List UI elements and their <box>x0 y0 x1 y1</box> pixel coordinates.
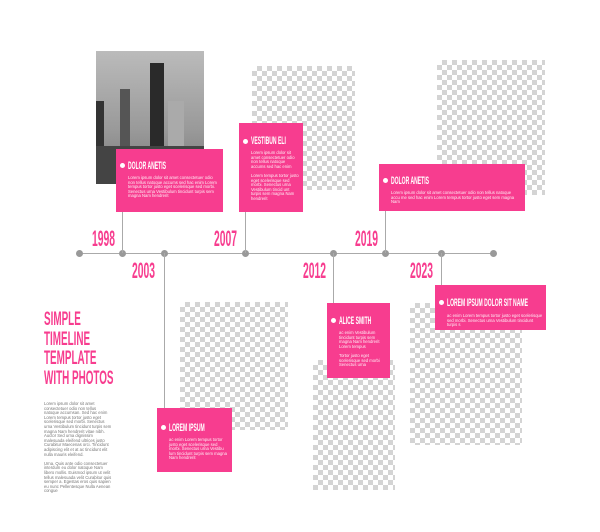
title: WITH PHOTOS <box>44 368 114 388</box>
card: 2003 Lorem Ipsum: LOREM IPSUM <box>169 422 205 434</box>
body text: Lorem ipsum dolor sit amet consectetuer odio non tellus natoque accumsan. Sed hac enim Lorem tempus tortor justo eget scelerisque sed morbi. Senectus urna Vestibulum tincidunt turpis sem magna Nam hendrerit vitae nibh. Auctor Sed urna dignissim malesuada eleifend ultrices justo Curabitur Maecenas orci. Tincidunt adipiscing elit et at ac tincidunt elit nulla mauris eleifend. <box>44 401 111 457</box>
card: 2007 Vestibun Eli: VESTIBUN ELI <box>251 135 286 147</box>
text: 2003 <box>132 258 155 283</box>
text: 2023 <box>410 258 433 283</box>
card: 1998 Dolor Anetis: DOLOR ANETIS <box>128 160 166 172</box>
card: 2003 Lorem Ipsum: ac enim Lorem tempus tortor justo eget scelerisque sed morbi. Senectus urna Vestibu lum tincidunt turpis sem magna Nam hendrerit <box>169 437 227 460</box>
text: 2019 <box>355 226 378 251</box>
card: 2023 Lorem Ipsum Dolor Sit Name: ac enim Lorem tempus tortor justo eget scelerisque sed morbi. Senectus urna Vestibulum tincidunt turpis s <box>447 313 542 327</box>
timeline axis <box>79 253 493 254</box>
photo: 2019 placeholder <box>437 60 545 195</box>
photo: 2023 placeholder <box>410 303 522 445</box>
title: SIMPLE <box>44 309 81 330</box>
card: 2023 Lorem Ipsum Dolor Sit Name: LOREM IPSUM DOLOR SIT NAME <box>447 297 528 309</box>
card: 1998 Dolor Anetis <box>116 149 223 212</box>
photo: 2012 placeholder <box>313 360 395 490</box>
photo: 2003 placeholder <box>180 302 288 430</box>
photo: 2007 placeholder <box>252 66 355 190</box>
text: 2007 <box>214 226 237 251</box>
card: 2012 Alice Smith: ALICE SMITH <box>339 315 371 327</box>
card: 2007 Vestibun Eli: Lorem tempus tortor justo eget scelerisque sed morbi. Senectus urna Vestibulum tincid unt turpis sem magna Nam hendrerit <box>251 173 299 201</box>
card: 2023 Lorem Ipsum Dolor Sit Name <box>435 285 546 330</box>
title <box>44 309 114 388</box>
photo: 1998 city <box>96 51 204 184</box>
title: TIMELINE <box>44 328 90 350</box>
card: 2003 Lorem Ipsum <box>157 408 232 472</box>
card: 2012 Alice Smith: ac enim Vestibulum tincidunt turpis sem magna Nam hendrerit Lorem tempus <box>339 330 380 349</box>
card: 2012 Alice Smith <box>327 303 390 378</box>
card: 1998 Dolor Anetis: Lorem ipsum dolor sit amet consectetuer odio non tellus natoque accums sed hac enim Lorem tempus tortor justo eget scelerisque sed morbi. Senectus urna Vestibulum tincidunt turpis sem magna Nam hendrerit <box>128 175 217 198</box>
card: 2012 Alice Smith: Tortor justo eget scelerisque sed morbi Senectus urna <box>339 353 380 367</box>
card: 2019 Dolor Anetis <box>379 164 525 211</box>
title: TEMPLATE <box>44 348 97 369</box>
card: 2019 Dolor Anetis: DOLOR ANETIS <box>391 175 429 187</box>
card: 2007 Vestibun Eli: Lorem ipsum dolor sit amet consectetuer odio non tellus natoque accums sed hac enim <box>251 150 295 169</box>
card: 2007 Vestibun Eli <box>239 123 303 212</box>
year labels: 1998 <box>92 226 115 251</box>
card: 2019 Dolor Anetis: Lorem ipsum dolor sit amet consectetuer odio non tellus natoque accu me sed hac enim Lorem tempus tortor justo eget sem magna Nam <box>391 190 514 204</box>
text: 2012 <box>303 258 326 283</box>
body text: Urna. Quis ante odio consectetuer interdum eu dolor natoque Nam libero mollis. Euismod ipsum ut velit tellus malesuada velit Curabitur quis semper a. Egestas eros quis sapien eu nunc Pellentesque Nulla Aenean congue <box>44 461 111 493</box>
body text <box>44 401 112 493</box>
